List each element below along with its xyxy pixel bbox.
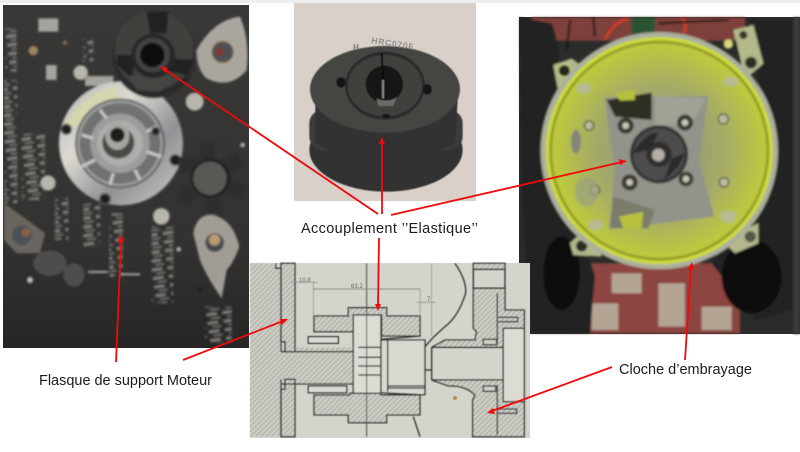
bosses [584, 114, 729, 195]
bell body [541, 32, 778, 269]
arrow: coupling label to bell photo [391, 159, 627, 215]
label: elastic coupling: Accouplement ’’Elastique’’ [301, 221, 478, 237]
central casting [604, 96, 714, 229]
arrow: clutch label to drawing [487, 367, 612, 414]
technical drawing section: 7 [427, 297, 431, 303]
technical drawing section: 63,2 [351, 284, 363, 290]
center line and thin lines [365, 263, 368, 437]
arrow: coupling label to flange photo [160, 66, 378, 214]
aluminium disc [59, 81, 183, 205]
label: clutch bell: Cloche d’embrayage [619, 362, 752, 378]
arrow: flange label to drawing [183, 319, 288, 360]
arrow: clutch label to bell photo [685, 262, 694, 360]
technical drawing section [250, 263, 530, 438]
photo: clutch bell housing [519, 17, 800, 334]
photo: coupling close-up [294, 3, 476, 201]
bolts [40, 65, 204, 225]
arrow: coupling label to coupling photo [379, 137, 385, 214]
left flange hatching [250, 263, 357, 437]
arrow: flange label to photo [116, 235, 124, 362]
dimension labels: 10,8 [299, 278, 311, 284]
bolts [618, 115, 693, 190]
photo: coupling close-up: H [353, 43, 359, 52]
bell outline curve [425, 263, 466, 347]
label: motor support flange: Flasque de support Moteur [39, 373, 212, 389]
rubber coupling [112, 15, 196, 98]
arrow: coupling label to drawing [375, 238, 381, 311]
worn plate patches [4, 28, 232, 343]
engraved marking: HRC070F [371, 35, 415, 52]
corner welds [197, 17, 247, 83]
elastomer spider [177, 143, 246, 214]
mounting lugs [553, 25, 763, 257]
coupling hub hatching [314, 308, 420, 336]
stain mark [453, 396, 457, 400]
top window edge [0, 0, 800, 3]
dimension lines [292, 282, 436, 302]
photo: motor support flange [3, 5, 249, 348]
coupling in bell [630, 125, 688, 183]
right bell hatching [473, 263, 505, 269]
arrows [116, 66, 694, 414]
